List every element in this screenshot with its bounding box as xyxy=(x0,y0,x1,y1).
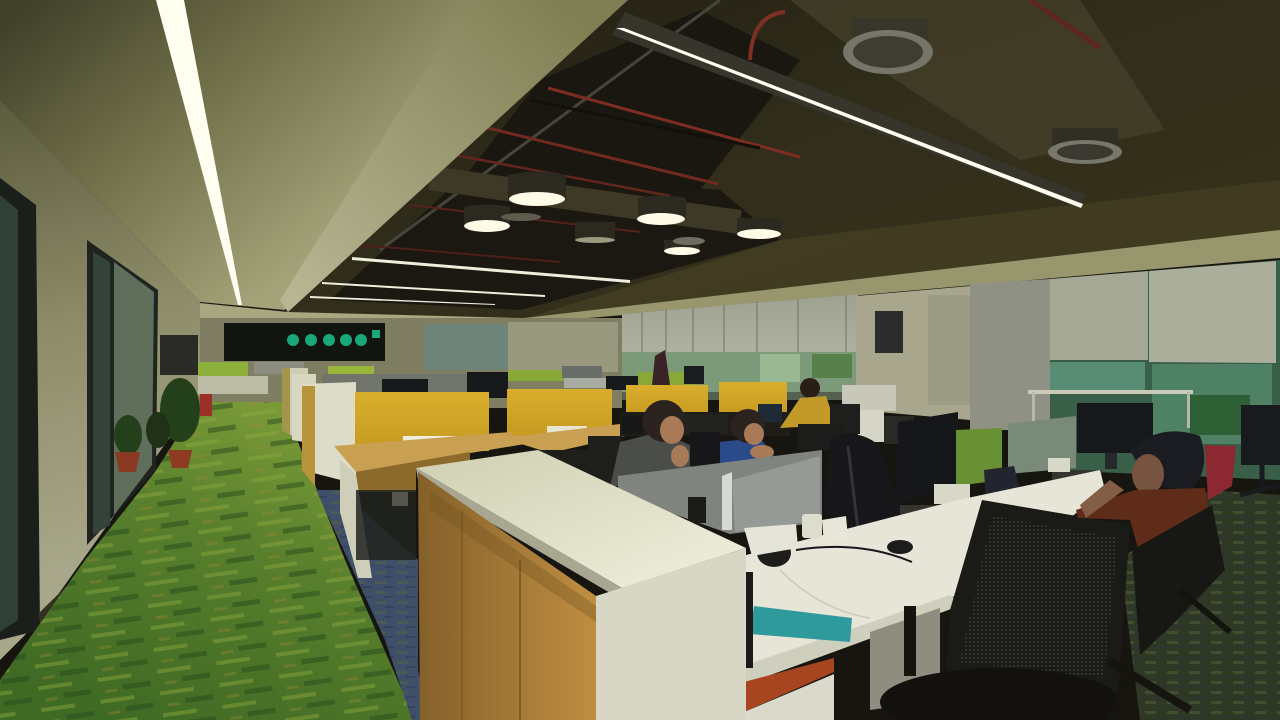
plants in planters xyxy=(114,378,212,472)
monitors right xyxy=(898,403,1153,525)
back wall display screen xyxy=(224,323,385,361)
blue patterned carpet strip xyxy=(316,490,430,720)
distant linear lights xyxy=(260,257,630,325)
glass meeting room xyxy=(87,240,198,545)
exposed ducts and pipes xyxy=(360,0,1100,262)
wood desks xyxy=(334,412,790,578)
far right window wall xyxy=(970,260,1280,480)
printer station xyxy=(830,385,914,444)
back wall xyxy=(198,318,622,408)
foreground mesh office chair xyxy=(880,500,1190,720)
column with wall poster xyxy=(856,286,970,420)
left glass door dark frame xyxy=(0,178,88,640)
yellow partitions xyxy=(355,382,787,451)
left wall xyxy=(0,100,200,660)
desk items xyxy=(744,514,913,668)
linear ceiling light left xyxy=(156,0,242,305)
ceiling beam xyxy=(280,0,628,312)
dark exposed ceiling xyxy=(285,0,1280,320)
black backpack xyxy=(824,434,904,536)
seated worker in brown shirt xyxy=(1076,431,1236,655)
green carpet aisle xyxy=(0,402,415,720)
light ceiling panel left xyxy=(0,0,470,310)
window back xyxy=(424,324,508,370)
end panels of left row xyxy=(282,368,356,486)
right side carpet xyxy=(1120,490,1280,720)
distant worker in yellow shirt xyxy=(758,378,836,428)
seated workers with headsets xyxy=(588,400,844,487)
grey glass partition with monitor xyxy=(618,450,822,534)
bulkhead band right xyxy=(490,230,1280,322)
foreground white-topped wood cabinet xyxy=(416,450,746,720)
right side window wall xyxy=(622,294,858,400)
round ceiling vents xyxy=(843,18,1122,164)
linear ceiling fixture right xyxy=(612,12,1085,208)
empty chair far right xyxy=(1240,405,1280,495)
white main desk xyxy=(744,470,1105,720)
pendant lamps xyxy=(464,172,781,255)
far workstation row xyxy=(198,350,704,398)
